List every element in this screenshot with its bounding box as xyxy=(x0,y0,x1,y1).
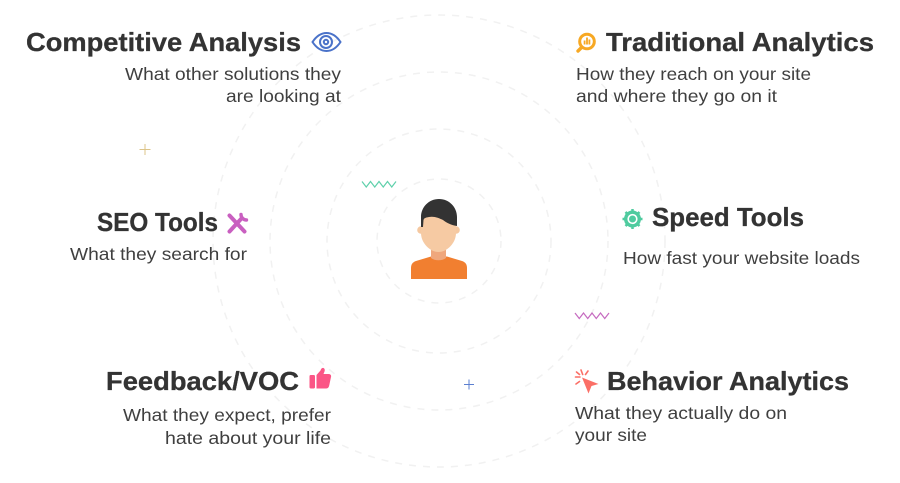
block: Speed Tools xyxy=(622,202,860,268)
decoration: tan plus xyxy=(140,144,150,155)
block: Feedback/VOC: hate about your life xyxy=(165,428,331,448)
person: shirt xyxy=(411,256,467,279)
heading: Competitive Analysis xyxy=(26,27,301,57)
block: Competitive Analysis xyxy=(26,27,341,106)
heading: Feedback/VOC xyxy=(106,366,299,396)
description: How they reach on your site xyxy=(576,64,811,84)
person: hair xyxy=(421,199,457,227)
icon: eye xyxy=(312,33,340,51)
icon: crossed tools xyxy=(230,214,246,232)
decoration: teal zigzag xyxy=(362,182,396,187)
block: Behavior Analytics: your site xyxy=(575,425,647,445)
decoration: blue plus xyxy=(464,380,474,390)
heading: Traditional Analytics xyxy=(606,27,874,57)
description: How fast your website loads xyxy=(623,248,860,268)
heading: SEO Tools xyxy=(97,207,218,237)
block: SEO Tools xyxy=(70,207,247,264)
description: What they actually do on xyxy=(575,403,787,423)
icon: thumbs up xyxy=(310,368,331,388)
icon: cursor click xyxy=(576,370,598,394)
decoration: purple zigzag xyxy=(575,313,609,318)
description: What they expect, prefer xyxy=(123,405,331,425)
block: Traditional Analytics xyxy=(576,27,874,106)
block: Behavior Analytics xyxy=(575,366,849,445)
block: Feedback/VOC xyxy=(106,366,331,448)
heading: Behavior Analytics xyxy=(607,366,849,396)
block: Competitive Analysis: are looking at xyxy=(226,86,341,106)
description: What they search for xyxy=(70,244,247,264)
heading: Speed Tools xyxy=(652,202,804,232)
icon: gear xyxy=(622,209,642,229)
central person illustration xyxy=(411,199,467,279)
block: Traditional Analytics: and where they go on it xyxy=(576,86,777,106)
person: ears xyxy=(417,226,460,234)
icon: magnifier with bars xyxy=(578,34,594,51)
person: neck xyxy=(431,245,446,260)
person: face xyxy=(421,216,456,252)
description: What other solutions they xyxy=(125,64,341,84)
